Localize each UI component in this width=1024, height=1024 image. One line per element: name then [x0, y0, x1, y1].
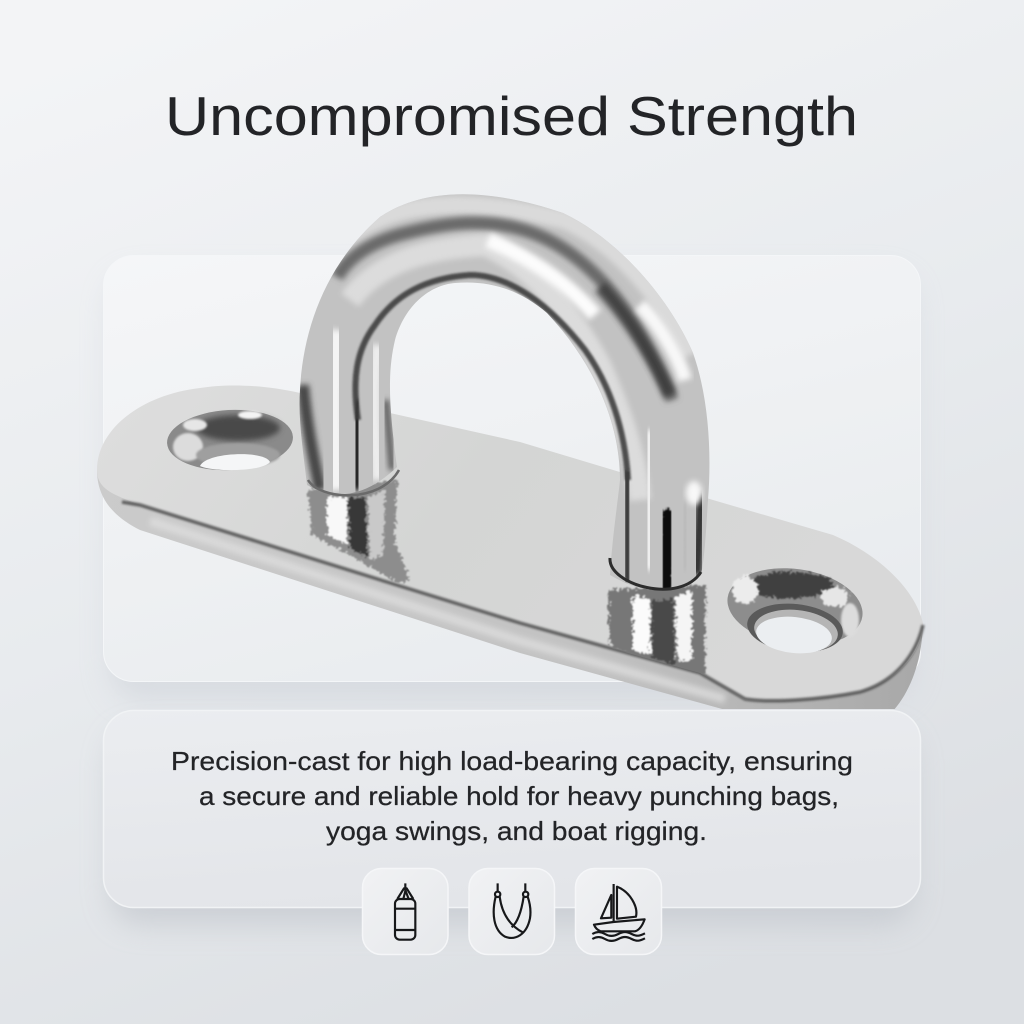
icon: sailboat	[576, 868, 662, 954]
ring top light band	[320, 205, 690, 355]
ring specular highlights	[488, 240, 595, 315]
mounting hole: left	[167, 410, 293, 470]
left leg bands	[334, 330, 338, 490]
ring	[300, 194, 709, 590]
ring underside light band	[350, 245, 640, 500]
description text: yoga swings, and boat rigging.	[326, 816, 707, 846]
description text: Precision-cast for high load-bearing capacity, ensuring	[171, 746, 853, 776]
product photo: stainless steel pad eye	[97, 194, 923, 712]
plate top surface	[97, 385, 923, 701]
plate edge	[97, 470, 923, 712]
description text: a secure and reliable hold for heavy punching bags,	[199, 781, 839, 811]
panel: product image card	[104, 256, 920, 700]
description text	[171, 746, 853, 846]
icon: yoga swing	[469, 868, 554, 954]
panel: description card	[104, 710, 920, 925]
right leg bands	[626, 470, 629, 580]
icon: punching bag	[362, 868, 448, 954]
plate dark rim line	[122, 502, 923, 701]
title: Uncompromised Strength	[165, 85, 858, 147]
ring upper dark band	[337, 223, 672, 400]
mounting hole: right	[728, 568, 862, 654]
ring reflections on plate	[308, 480, 706, 680]
ring inner dark edge	[355, 275, 628, 480]
collar seams	[308, 470, 399, 495]
plate lower edge highlight	[150, 521, 725, 699]
